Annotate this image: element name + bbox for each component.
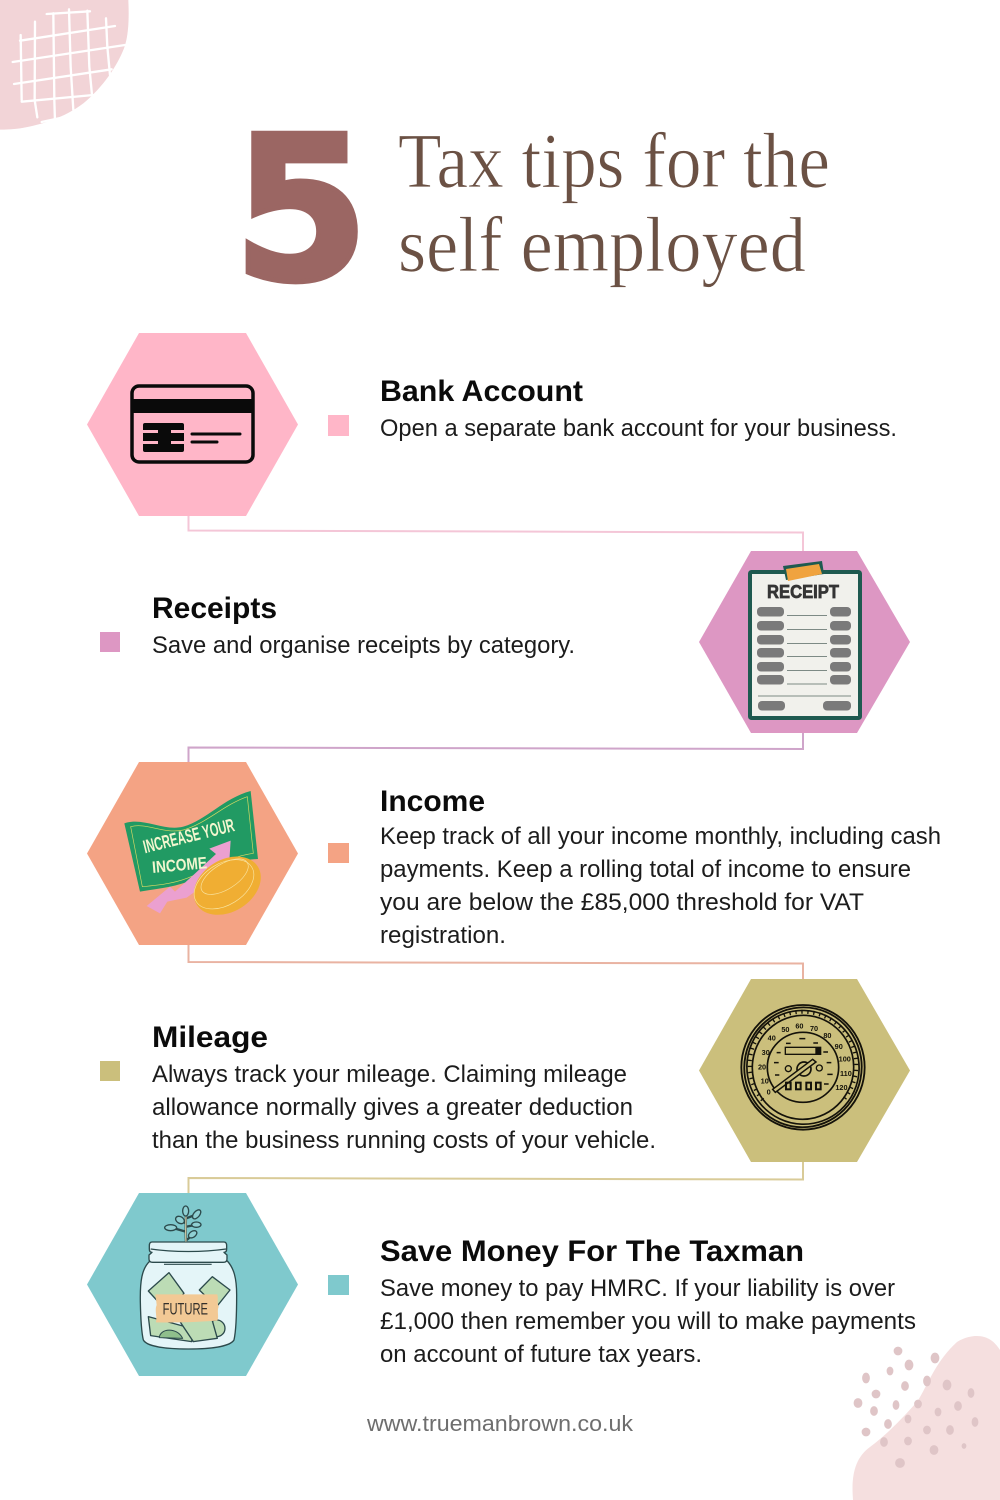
panel: save money for the taxman: [87, 1193, 916, 1376]
icon: speedometer: 80: [823, 1031, 831, 1040]
panel: income: [87, 762, 941, 949]
icon: speedometer: 0: [767, 1087, 771, 1096]
connector: receipts to income: [188, 733, 803, 762]
icon: speedometer: 90: [835, 1042, 843, 1051]
text: income: payments. Keep a rolling total of income to ensure: [380, 856, 911, 883]
title: heading text: self employed: [398, 201, 806, 288]
hexagon: income: [87, 762, 298, 945]
icon: increase your income: INCREASE YOUR: [141, 814, 237, 857]
icon: speedometer: 30: [762, 1048, 770, 1057]
text: income: you are below the £85,000 threshold for VAT: [380, 889, 864, 916]
footer: website: www.truemanbrown.co.uk: [366, 1411, 634, 1436]
icon: increase your income: INCOME: [151, 853, 208, 877]
text: receipts: Save and organise receipts by category.: [152, 632, 575, 659]
bullet: save money: [328, 1275, 349, 1295]
icon: speedometer: 100: [839, 1054, 851, 1063]
heading: income: Income: [380, 785, 485, 818]
heading: save money: Save Money For The Taxman: [380, 1235, 804, 1268]
panel: bank account: [87, 333, 897, 516]
hexagon: receipts: [699, 551, 910, 733]
icon: speedometer: 10: [761, 1076, 769, 1085]
heading: bank account: Bank Account: [380, 375, 583, 408]
decoration: top-left blob with grid: [0, 0, 129, 130]
bullet: mileage: [100, 1061, 120, 1081]
bullet: receipts: [100, 632, 120, 652]
title: heading text: [398, 117, 830, 288]
text: mileage: [152, 1061, 656, 1154]
icon: speedometer: 110: [840, 1069, 852, 1078]
text: mileage: Always track your mileage. Claiming mileage: [152, 1061, 627, 1088]
connector: bank to receipts: [188, 516, 803, 551]
icon: speedometer: 20: [758, 1063, 766, 1072]
connector: income to mileage: [188, 945, 803, 979]
text: bank account: Open a separate bank account for your business.: [380, 415, 897, 442]
hexagon: bank account: [87, 333, 298, 516]
decoration: bottom-right blob with dots: [853, 1336, 1000, 1500]
text: mileage: than the business running costs of your vehicle.: [152, 1127, 656, 1154]
text: save money: [380, 1275, 916, 1368]
icon: speedometer: 60: [795, 1022, 803, 1031]
icon: receipt: RECEIPT: [767, 582, 839, 602]
text: save money: £1,000 then remember you will to make payments: [380, 1308, 916, 1335]
text: income: Keep track of all your income monthly, including cash: [380, 823, 941, 850]
hexagon: mileage: [699, 979, 910, 1162]
text: save money: on account of future tax years.: [380, 1341, 702, 1368]
panel: receipts: [100, 551, 910, 733]
heading: mileage: Mileage: [152, 1021, 268, 1054]
text: income: registration.: [380, 922, 506, 949]
icon: speedometer: [731, 995, 875, 1140]
title: number 5: 5: [233, 94, 369, 327]
icon: speedometer: 50: [781, 1025, 789, 1034]
bullet: income: [328, 843, 349, 863]
icon: speedometer: 40: [768, 1033, 776, 1042]
icon: savings jar: [140, 1206, 237, 1349]
icon: bank card: [132, 386, 253, 462]
icon: speedometer: 70: [810, 1024, 818, 1033]
text: mileage: allowance normally gives a greater deduction: [152, 1094, 633, 1121]
panel: mileage: [100, 979, 910, 1162]
hexagon: save money: [87, 1193, 298, 1376]
connector: mileage to save money: [188, 1162, 803, 1193]
heading: receipts: Receipts: [152, 592, 277, 625]
text: income: [380, 823, 941, 949]
icon: receipt: [750, 561, 860, 718]
icon: savings jar: FUTURE: [163, 1299, 208, 1318]
icon: increase your income: [124, 791, 272, 927]
title: heading text: Tax tips for the: [398, 117, 830, 204]
text: save money: Save money to pay HMRC. If your liability is over: [380, 1275, 895, 1302]
icon: speedometer: 120: [835, 1083, 848, 1092]
bullet: bank account: [328, 415, 349, 436]
